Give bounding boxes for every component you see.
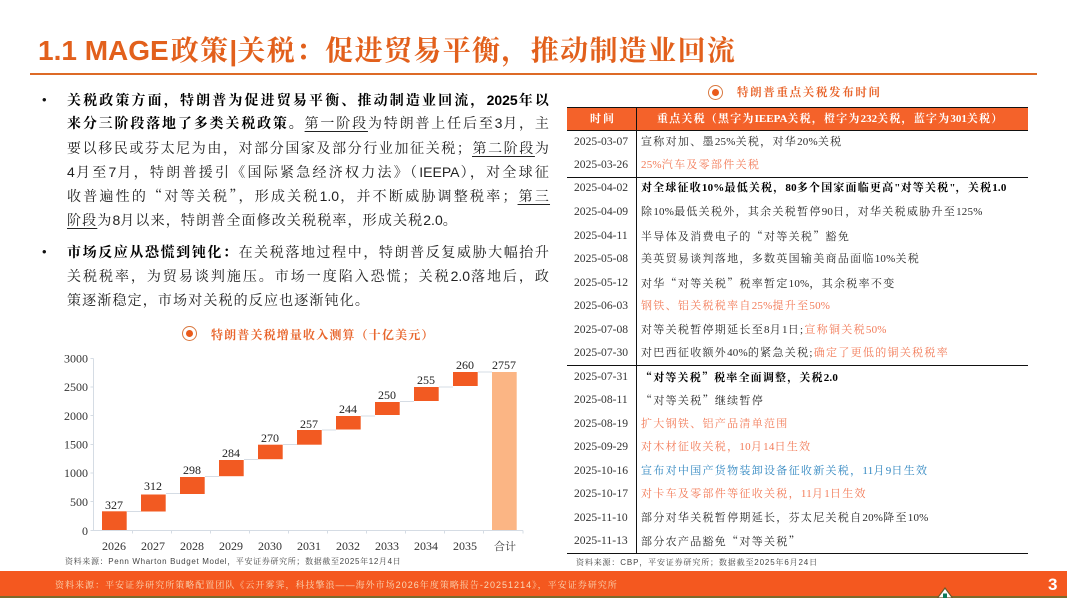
waterfall chart: 0 — [82, 524, 88, 538]
table rows: 2025-11-13 — [574, 534, 628, 547]
table rows: 美英贸易谈判落地，多数英国输美商品面临10%关税 — [641, 253, 920, 265]
chart source note: 资料来源：Penn Wharton Budget Model，平安证券研究所；数据截至2025年12月4日 — [65, 557, 401, 566]
waterfall chart: 260 — [456, 358, 474, 372]
logo mark — [937, 587, 953, 598]
table rows: 2025-07-31 — [574, 370, 628, 383]
table rows: 2025-07-08 — [574, 323, 628, 336]
table rows: 25%汽车及零部件关税 — [641, 159, 760, 171]
table rows: 钢铁、铝关税税率自25%提升至50% — [641, 300, 830, 312]
table rows: 2025-06-03 — [574, 299, 628, 312]
text block: tariff policy and market reaction: • — [42, 92, 47, 107]
table rows: 半导体及消费电子的“对等关税”豁免 — [641, 228, 850, 244]
table rows: 对木材征收关税，10月14日生效 — [641, 441, 811, 453]
text: 4月至7月，特朗普援引《国际紧急经济权力法》（IEEPA），对全球征 — [67, 164, 550, 180]
table rows: 2025-04-02 — [574, 181, 628, 194]
waterfall chart: 312 — [144, 479, 162, 493]
table header: 重点关税（黑字为IEEPA关税，橙字为232关税，蓝字为301关税） — [657, 113, 1003, 125]
waterfall chart: 255 — [417, 373, 435, 387]
table rows: 2025-08-19 — [574, 417, 628, 430]
text: 策逐渐稳定，市场对关税的反应也逐渐钝化。 — [67, 292, 370, 308]
footer band — [0, 571, 1067, 598]
waterfall chart: 2030 — [258, 539, 282, 553]
waterfall chart: 2029 — [219, 539, 243, 553]
table rows: 宣称对加、墨25%关税，对华20%关税 — [641, 136, 842, 148]
text: 要以移民或芬太尼为由，对部分国家及部分行业加征关税；第二阶段为 — [67, 140, 550, 156]
waterfall chart: 3000 — [64, 352, 88, 366]
waterfall chart: 250 — [378, 388, 396, 402]
waterfall chart: 327 — [105, 498, 123, 512]
table rows: 2025-04-11 — [574, 229, 628, 242]
table heading — [708, 85, 882, 100]
table rows: 扩大钢铁、铝产品清单范围 — [641, 418, 789, 430]
table source note: 资料来源：CBP，平安证券研究所；数据截至2025年6月24日 — [576, 558, 818, 567]
title underline — [30, 72, 1037, 74]
table rows: “对等关税”继续暂停 — [641, 392, 764, 408]
table rows: 2025-11-10 — [574, 511, 628, 524]
text block: tariff policy and market reaction: • — [42, 244, 47, 259]
table rule — [567, 177, 1028, 178]
text: 收普遍性的“对等关税”，形成关税1.0，并不断威胁调整税率；第三 — [67, 186, 550, 206]
table rows: 对等关税暂停期延长至8月1日;宣称铜关税50% — [641, 324, 887, 336]
waterfall chart: 1000 — [64, 466, 88, 480]
table rows: 2025-10-16 — [574, 464, 628, 477]
waterfall chart: 2757 — [492, 358, 516, 372]
table rows: 部分农产品豁免“对等关税” — [641, 533, 801, 549]
table rows: 2025-08-11 — [574, 393, 628, 406]
waterfall chart: 1500 — [64, 438, 88, 452]
footer bottom strip — [0, 596, 1067, 598]
table rows: 2025-03-07 — [574, 135, 628, 148]
table: key tariff timeline — [567, 107, 1028, 553]
waterfall chart: 2031 — [297, 539, 321, 553]
table heading: 特朗普重点关税发布时间 — [737, 87, 882, 99]
table vertical divider — [636, 107, 637, 553]
table rows: 对巴西征收额外40%的紧急关税;确定了更低的铜关税税率 — [641, 347, 949, 359]
waterfall chart: 2032 — [336, 539, 360, 553]
waterfall chart: 2500 — [64, 380, 88, 394]
text: 关税税率，为贸易谈判施压。市场一度陷入恐慌；关税2.0落地后，政 — [67, 268, 550, 284]
waterfall chart: 2027 — [141, 539, 165, 553]
waterfall chart: 2035 — [453, 539, 477, 553]
text: 来分三阶段落地了多类关税政策。第一阶段为特朗普上任后至3月，主 — [67, 115, 550, 131]
table rows: 2025-04-09 — [574, 205, 628, 218]
waterfall chart: 244 — [339, 402, 357, 416]
footer source text: 资料来源：平安证券研究所策略配置团队《云开雾霁，科技擎浪——海外市场2026年度策略报告-20251214》，平安证券研究所 — [55, 580, 618, 590]
waterfall chart: 257 — [300, 417, 318, 431]
text: 市场反应从恐慌到钝化：在关税落地过程中，特朗普反复威胁大幅抬升 — [67, 244, 550, 260]
table rows: 除10%最低关税外，其余关税暂停90日，对华关税威胁升至125% — [641, 206, 983, 218]
table rows: 2025-07-30 — [574, 346, 628, 359]
waterfall chart: 2028 — [180, 539, 204, 553]
waterfall chart — [64, 352, 524, 553]
table rule — [567, 553, 1028, 554]
table rows: 2025-05-08 — [574, 252, 628, 265]
table rule — [567, 365, 1028, 366]
table rows: 2025-10-17 — [574, 487, 628, 500]
text: 关税政策方面，特朗普为促进贸易平衡、推动制造业回流，2025年以 — [67, 92, 550, 108]
waterfall chart: 2033 — [375, 539, 399, 553]
waterfall chart: 2000 — [64, 409, 88, 423]
text block: tariff policy and market reaction — [42, 92, 47, 259]
table rows: 对卡车及零部件等征收关税，11月1日生效 — [641, 488, 867, 500]
waterfall chart: 合计 — [494, 539, 516, 553]
waterfall chart: 2026 — [102, 539, 126, 553]
chart heading: 特朗普关税增量收入测算（十亿美元） — [211, 328, 435, 342]
table rows: 对全球征收10%最低关税，80多个国家面临更高"对等关税"，关税1.0 — [641, 182, 1007, 194]
table rows: “对等关税”税率全面调整，关税2.0 — [641, 369, 838, 385]
text: 阶段为8月以来，特朗普全面修改关税税率，形成关税2.0。 — [67, 212, 458, 228]
title: 1.1 MAGE政策|关税：促进贸易平衡，推动制造业回流 — [38, 29, 736, 69]
table rows — [574, 135, 1007, 549]
table rows: 2025-09-29 — [574, 440, 628, 453]
table rows: 部分对华关税暂停期延长，芬太尼关税自20%降至10% — [641, 512, 929, 524]
table rows: 2025-05-12 — [574, 276, 628, 289]
waterfall chart: 500 — [70, 495, 88, 509]
table rows: 对华“对等关税”税率暂定10%，其余税率不变 — [641, 275, 896, 291]
page number: 3 — [1048, 575, 1057, 594]
table header: 时间 — [590, 113, 616, 125]
waterfall chart: 284 — [222, 446, 240, 460]
waterfall chart: 270 — [261, 431, 279, 445]
waterfall chart: 298 — [183, 463, 201, 477]
waterfall chart: 2034 — [414, 539, 438, 553]
table header — [567, 107, 1028, 131]
table rows: 宣布对中国产货物装卸设备征收新关税，11月9日生效 — [641, 465, 928, 477]
table rows: 2025-03-26 — [574, 158, 628, 171]
